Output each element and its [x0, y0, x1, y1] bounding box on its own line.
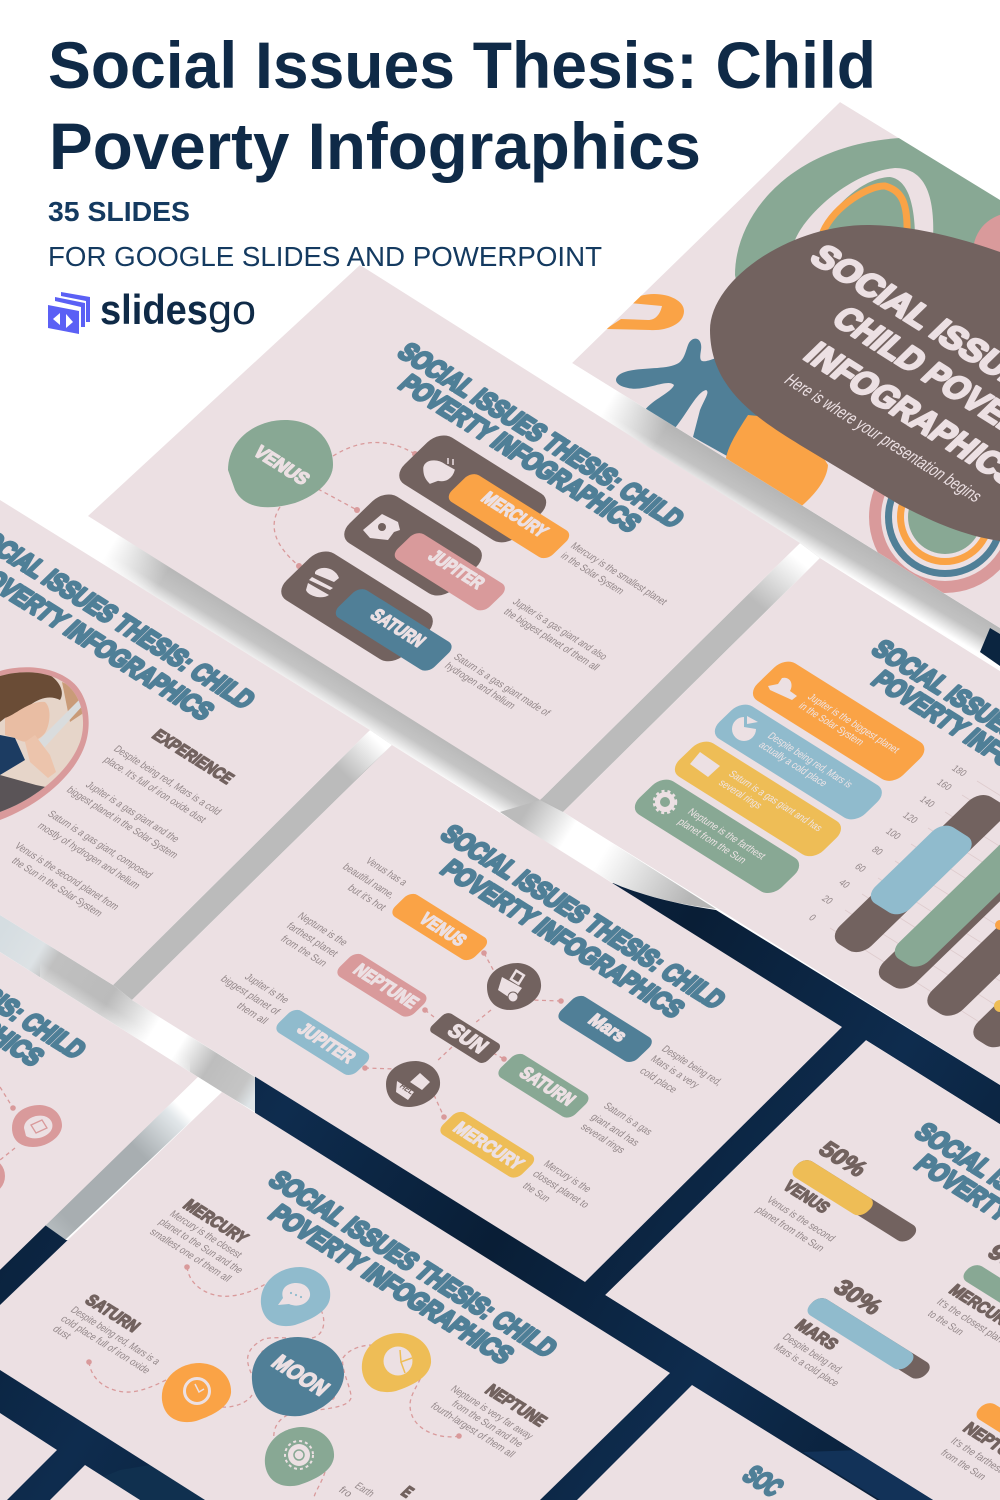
item: saturn: Saturn is a gas giant made of	[451, 652, 553, 719]
slide title	[912, 1122, 1000, 1220]
main title	[48, 28, 876, 183]
item: sun pill	[427, 1011, 503, 1065]
experience text: Despite being red, Mars is a cold	[111, 744, 223, 818]
heading and text: mercury: Mercury is the closest	[167, 1209, 244, 1261]
slide title: POVERTY INFOGRAPHICS	[262, 1200, 520, 1369]
item: neptune pill: NEPTUNE	[349, 960, 424, 1012]
cover title	[796, 238, 1000, 493]
heading and text: earth: fro	[336, 1485, 355, 1500]
item: jupiter	[337, 489, 610, 673]
progress: mars 30%: Mars is a cold place	[771, 1342, 842, 1389]
shape: orange arc	[606, 294, 684, 330]
blob and icon: chat	[261, 1267, 330, 1326]
logo: slidesgo: go	[208, 286, 256, 333]
progress: neptune	[940, 1403, 1000, 1480]
progress: mars 30%: 30%	[828, 1275, 888, 1319]
shape: rainbow rings	[869, 490, 1000, 593]
chart: axis labels and gridlines: 180	[950, 763, 969, 778]
item: saturn: hydrogen and helium	[442, 661, 518, 712]
panel: bottom slide	[577, 1385, 877, 1500]
slide title	[870, 640, 1000, 766]
experience text: Venus is the second planet from	[12, 841, 121, 913]
chart: bars	[828, 790, 1000, 1052]
sun slide descriptions: Mars is a very	[648, 1054, 701, 1091]
card: neptune	[634, 780, 800, 893]
chart: axis labels and gridlines: 40	[837, 877, 852, 890]
sun slide descriptions: Jupiter is the	[242, 972, 292, 1006]
pink blob partial	[0, 1164, 5, 1188]
panel: lower left slide	[0, 952, 198, 1270]
chart: axis labels and gridlines: 160	[935, 777, 954, 792]
chart: axis labels and gridlines: 20	[820, 893, 835, 906]
progress: venus 50%: planet from the Sun	[753, 1205, 826, 1254]
sun slide descriptions: Saturn is a gas	[601, 1101, 654, 1138]
panel: progress bars slide	[605, 1040, 1000, 1500]
heading and text: neptune	[428, 1381, 551, 1460]
venus blob: VENUS	[249, 442, 315, 489]
photo: child at table	[0, 665, 90, 830]
heading and text: saturn: cold place full of iron oxide	[58, 1314, 153, 1377]
panel: bar chart slide	[563, 558, 1000, 1098]
card: jupiter: in the Solar System	[796, 701, 866, 748]
subtitle: slide count: 35 SLIDES	[48, 196, 190, 227]
panel: cover slide	[572, 102, 1000, 628]
subtitle: platforms: FOR GOOGLE SLIDES AND POWERPOINT	[48, 241, 602, 272]
slide title: POVERTY INFOGRAPHICS	[392, 370, 647, 538]
chart: axis labels and gridlines: 120	[901, 810, 920, 825]
main title: Poverty Infographics	[49, 109, 701, 183]
shape: teal splat	[616, 338, 757, 456]
logo: slidesgo: slides	[100, 286, 208, 333]
progress: venus 50%	[753, 1137, 920, 1254]
progress: mercury	[928, 1244, 1000, 1342]
sun slide descriptions: the Sun	[520, 1181, 553, 1204]
progress: venus 50%: 50%	[813, 1137, 873, 1181]
shape: brown title blob	[710, 225, 1000, 541]
heading and text: earth	[336, 1481, 418, 1500]
slide title: POVERTY INFOGRAPHICS	[434, 855, 690, 1023]
item: saturn: SATURN	[366, 605, 430, 651]
blob and icon: pie	[362, 1333, 431, 1392]
progress: mars 30%: Despite being red,	[780, 1332, 846, 1376]
heading and text: mercury	[147, 1196, 252, 1284]
connector lines	[362, 950, 564, 1120]
panel: experience slide	[0, 500, 370, 985]
progress: venus 50%: VENUS	[779, 1177, 834, 1217]
item: mars pill	[554, 993, 656, 1065]
experience text	[9, 744, 223, 919]
sun slide descriptions: beautiful name,	[340, 862, 397, 901]
card: mars: Despite being red, Mars is	[765, 731, 855, 790]
chart: axis labels and gridlines	[809, 766, 1000, 1022]
slide title: SOCIAL ISSUES THESIS: CHILD	[391, 338, 690, 533]
card: saturn: Saturn is a gas giant and has	[726, 769, 825, 834]
card: neptune: planet from the Sun	[675, 817, 748, 866]
progress: neptune: from the Sun	[938, 1448, 988, 1483]
progress: mercury: to the Sun	[925, 1309, 966, 1338]
card: jupiter	[752, 662, 924, 781]
card: saturn: several rings	[716, 778, 764, 811]
heading and text: neptune: NEPTUNE	[481, 1381, 551, 1430]
panel: venus list slide	[88, 265, 800, 800]
item: mercury pill: MERCURY	[449, 1118, 529, 1174]
heading and text: mercury: planet to the Sun and the	[156, 1217, 246, 1276]
heading and text: saturn: dust	[50, 1324, 73, 1342]
card: saturn	[674, 742, 841, 856]
item: mercury	[392, 430, 670, 608]
icon: help sign badge	[386, 1061, 440, 1107]
experience text: place. It's full of iron oxide dust	[101, 755, 209, 826]
sun slide descriptions: them all	[234, 1001, 270, 1027]
card: jupiter: Jupiter is the biggest planet	[805, 692, 902, 756]
sun slide descriptions: closest planet to	[530, 1169, 592, 1211]
blob and icon: clock	[162, 1363, 231, 1422]
connector lines	[0, 1087, 16, 1160]
blob: moon	[252, 1337, 344, 1416]
slide title: SOCIAL ISSUES THESIS: CHILD	[434, 820, 732, 1014]
item: saturn pill	[494, 1051, 592, 1121]
sun slide descriptions: Despite being red,	[659, 1044, 725, 1088]
card: mars: actually a cold place	[756, 740, 830, 789]
sun slide descriptions: cold place	[637, 1066, 680, 1096]
heading and text: saturn: SATURN	[81, 1291, 144, 1336]
heading and text: saturn	[50, 1291, 163, 1377]
heading and text: mercury: smallest one of them all	[147, 1227, 233, 1284]
icon: pink badge	[12, 1105, 62, 1147]
item: jupiter: JUPITER	[424, 546, 490, 593]
chart: axis labels and gridlines: 60	[853, 861, 868, 874]
item: venus pill	[388, 891, 491, 963]
blob: moon: MOON	[266, 1351, 334, 1400]
sun slide descriptions: farthest planet	[284, 921, 340, 959]
sun slide descriptions	[218, 856, 725, 1211]
blob and icon: gear	[265, 1427, 334, 1486]
logo: slidesgo	[48, 286, 256, 334]
card: mars	[714, 704, 882, 820]
item: saturn pill: SATURN	[515, 1063, 580, 1109]
item: jupiter: the biggest planet of them all	[501, 607, 601, 673]
experience text: biggest planet in the Solar System	[64, 785, 180, 861]
sun slide descriptions: Neptune is the	[295, 911, 350, 949]
item: jupiter pill	[272, 1007, 373, 1078]
sun slide descriptions: giant and has	[588, 1112, 641, 1149]
chart: axis labels and gridlines: 80	[870, 844, 885, 857]
heading and text: earth: Earth	[352, 1481, 377, 1500]
main title: Social Issues Thesis: Child	[48, 28, 876, 102]
panel: bottom left slide fragments	[0, 1413, 140, 1500]
progress: mars 30%: MARS	[791, 1316, 842, 1354]
panel: sun mind map slide	[132, 745, 842, 1282]
shape: orange blob	[725, 415, 828, 510]
connector lines	[274, 442, 418, 569]
icon: suitcase badge	[487, 963, 541, 1010]
item: mercury: Mercury is the smallest planet	[568, 541, 670, 608]
sun slide descriptions: from the Sun	[278, 934, 329, 969]
item: mars pill: Mars	[584, 1010, 632, 1046]
heading and text: saturn: Despite being red, Mars is a	[68, 1305, 163, 1368]
progress: venus 50%: Venus is the second	[764, 1195, 837, 1244]
slide title	[0, 988, 86, 1066]
item: jupiter pill: JUPITER	[293, 1019, 361, 1067]
chart: axis labels and gridlines: 100	[884, 826, 903, 841]
sun slide descriptions: biggest planet of	[218, 974, 282, 1017]
item: mercury pill	[436, 1109, 538, 1180]
item: neptune pill	[333, 951, 430, 1020]
chart: axis labels and gridlines: 0	[806, 913, 818, 923]
heading and text: neptune: from the Sun and the	[449, 1399, 526, 1450]
connector lines	[86, 1264, 462, 1497]
venus blob	[228, 420, 333, 507]
sun slide descriptions: several rings	[578, 1122, 627, 1156]
card: neptune: Neptune is the farthest	[685, 807, 768, 862]
background: navy base behind slides	[0, 628, 1000, 1500]
sun slide descriptions: Venus has a	[363, 856, 410, 888]
experience text: Jupiter is a gas giant and the	[83, 780, 182, 845]
sun slide descriptions: Mercury is the	[541, 1159, 594, 1195]
shape: green arch	[735, 138, 1000, 278]
sun slide descriptions: but it's hot	[345, 883, 388, 913]
item: sun pill: SUN	[442, 1020, 493, 1058]
chart: axis labels and gridlines: 140	[918, 794, 937, 809]
item: jupiter: Jupiter is a gas giant and also	[510, 597, 610, 663]
heading and text: mercury: MERCURY	[179, 1196, 252, 1247]
item: saturn	[274, 546, 553, 719]
icon: help sign badge: HELP	[397, 1082, 421, 1099]
item: mercury: in the Solar System	[558, 551, 626, 597]
slide title: SOCIAL ISSUES THESIS: CHILD	[262, 1166, 563, 1363]
item: venus pill: VENUS	[415, 909, 472, 950]
panel: moon slide	[0, 1092, 670, 1500]
experience text: Saturn is a gas giant, composed	[45, 809, 155, 881]
experience text: the Sun in the Solar System	[9, 856, 105, 919]
heading and text: neptune: Neptune is very far away	[448, 1384, 535, 1442]
experience text: mostly of hydrogen and helium	[35, 821, 142, 891]
heading and text: neptune: fourth-largest of them all	[428, 1401, 517, 1460]
item: mercury: MERCURY	[477, 488, 553, 541]
icon: stacked slides	[48, 292, 90, 334]
heading: experience: EXPERIENCE	[148, 726, 238, 788]
progress: mars 30%	[774, 1280, 930, 1386]
